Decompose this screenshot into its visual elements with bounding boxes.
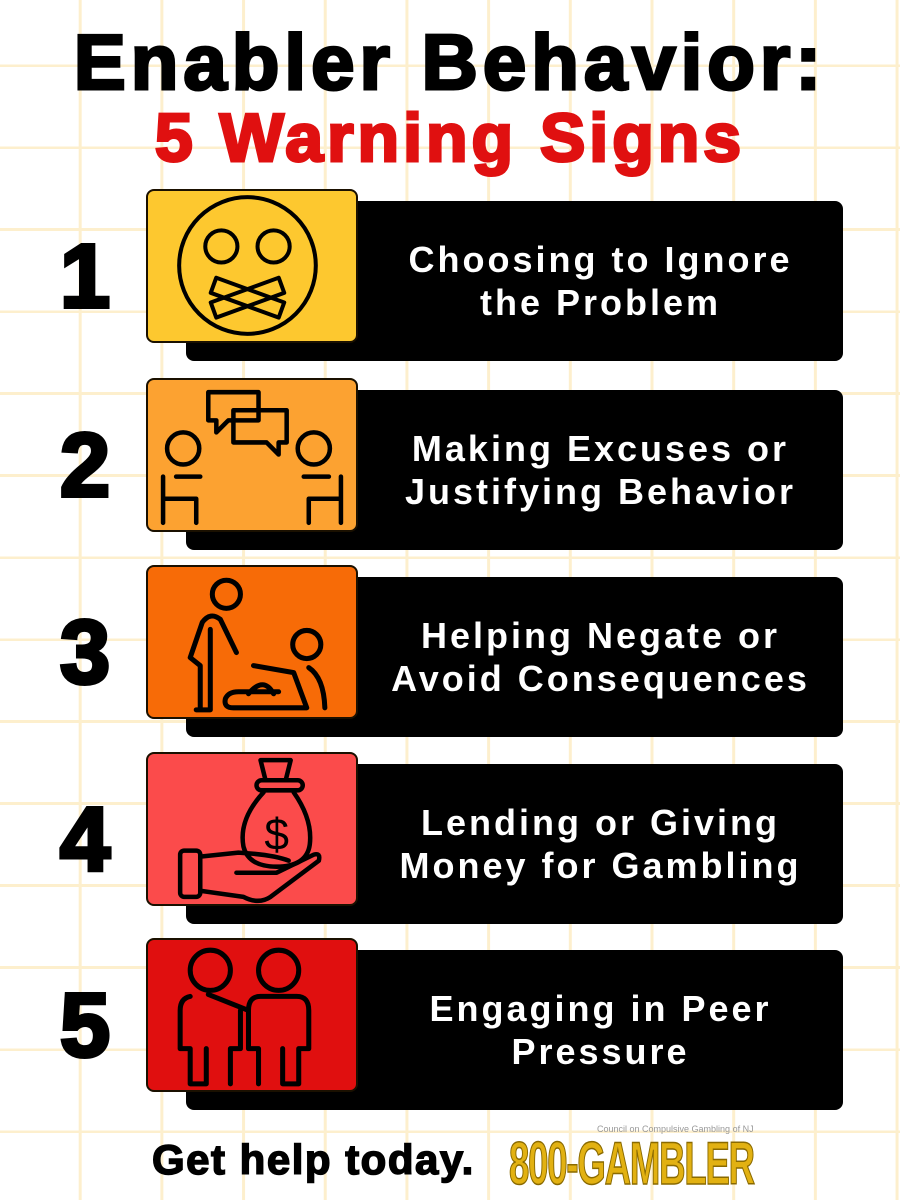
title: Enabler Behavior: — [74, 18, 826, 106]
icon box 4: money bag in hand — [146, 752, 358, 906]
text 4 — [399, 802, 802, 886]
text 5: Pressure — [511, 1031, 690, 1072]
icon box 2: conversation — [146, 378, 358, 532]
black bar 4 — [186, 764, 843, 924]
text 4: Lending or Giving — [421, 802, 780, 843]
row 3 — [60, 565, 843, 737]
number 3: 3 — [60, 603, 110, 703]
icon box 5: two friends — [146, 938, 358, 1092]
icon box 1: taped mouth face — [146, 189, 358, 343]
number 2: 2 — [60, 416, 110, 516]
icon box 4: money bag in hand: $ — [264, 811, 289, 860]
text 4: Money for Gambling — [399, 845, 802, 886]
text 3: Helping Negate or — [421, 615, 780, 656]
subtitle: 5 Warning Signs — [155, 100, 745, 176]
row 2 — [60, 378, 843, 550]
logo: 800-GAMBLER: 800-GAMBLER — [509, 1130, 754, 1197]
black bar 3 — [186, 577, 843, 737]
row 5 — [60, 938, 843, 1110]
number 1: 1 — [60, 227, 110, 327]
black bar 2 — [186, 390, 843, 550]
text 1 — [409, 239, 792, 323]
text 1: Choosing to Ignore — [409, 239, 792, 280]
black bar 5 — [186, 950, 843, 1110]
text 1: the Problem — [480, 282, 721, 323]
footer text: Get help today. — [152, 1136, 475, 1183]
icon box 3: helping fallen person — [146, 565, 358, 719]
text 5: Engaging in Peer — [429, 988, 772, 1029]
text 2: Making Excuses or — [412, 428, 789, 469]
logo: 800-GAMBLER: Council on Compulsive Gambling of NJ — [597, 1124, 754, 1134]
black bar 1 — [186, 201, 843, 361]
row 4 — [59, 752, 843, 924]
text 2: Justifying Behavior — [405, 471, 796, 512]
number 5: 5 — [60, 976, 110, 1076]
text 5 — [429, 988, 772, 1072]
row 1 — [60, 189, 843, 361]
text 3 — [391, 615, 810, 699]
text 2 — [405, 428, 796, 512]
text 3: Avoid Consequences — [391, 658, 810, 699]
number 4: 4 — [60, 790, 110, 890]
